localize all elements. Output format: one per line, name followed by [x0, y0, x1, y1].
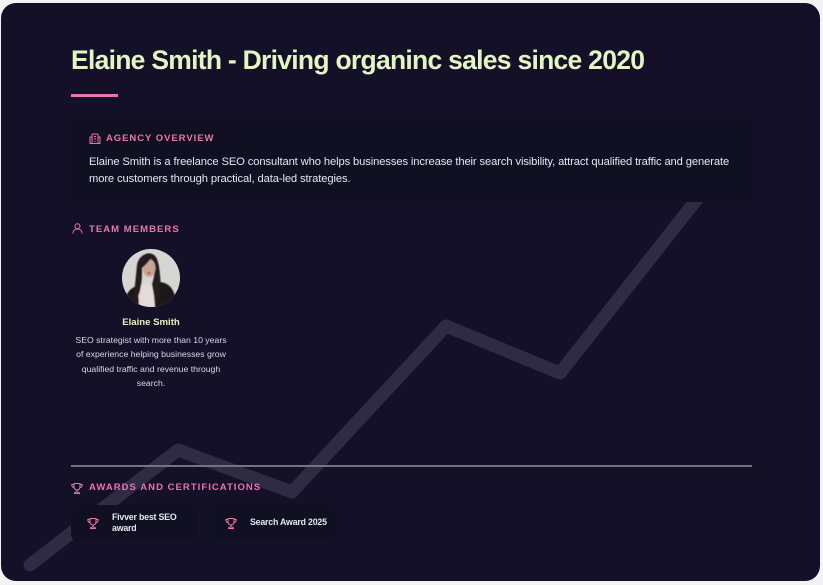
text: bio: qualified traffic and revenue through	[82, 364, 220, 374]
heading: team members: TEAM MEMBERS	[89, 224, 180, 235]
icon: person	[72, 223, 82, 234]
text: award name: award	[112, 523, 136, 533]
heading: agency overview: AGENCY OVERVIEW	[106, 133, 214, 144]
team member: Elaine Smith	[75, 249, 227, 388]
text: award name	[112, 512, 176, 533]
title: Elaine Smith - Driving organinc sales since 2020	[71, 45, 644, 75]
icon: building	[90, 134, 100, 144]
icon: trophy	[87, 518, 99, 529]
text: award name: Search Award 2025	[250, 517, 327, 527]
divider	[71, 465, 752, 467]
text: award name: Fivver best SEO	[112, 512, 176, 522]
text: bio	[75, 335, 227, 388]
text: bio: of experience helping businesses grow	[76, 349, 226, 359]
panel: agency overview	[71, 120, 752, 202]
heading: awards and certifications: AWARDS AND CERTIFICATIONS	[89, 482, 261, 493]
icon: trophy	[71, 483, 83, 494]
award card: Fiverr	[71, 505, 197, 541]
text: overview description	[89, 156, 729, 185]
name: Elaine Smith	[122, 317, 180, 328]
text: bio: SEO strategist with more than 10 years	[75, 335, 227, 345]
icon: trophy	[225, 518, 237, 529]
award card: Search Award	[210, 505, 335, 541]
text: overview description: Elaine Smith is a freelance SEO consultant who helps businesses increase their search visibility, attract qualified traffic and generate	[89, 156, 729, 168]
title underline	[71, 94, 118, 97]
text: bio: search.	[137, 378, 165, 388]
photo: portrait	[122, 249, 180, 307]
text: overview description: more customers through practical, data-led strategies.	[89, 173, 350, 185]
